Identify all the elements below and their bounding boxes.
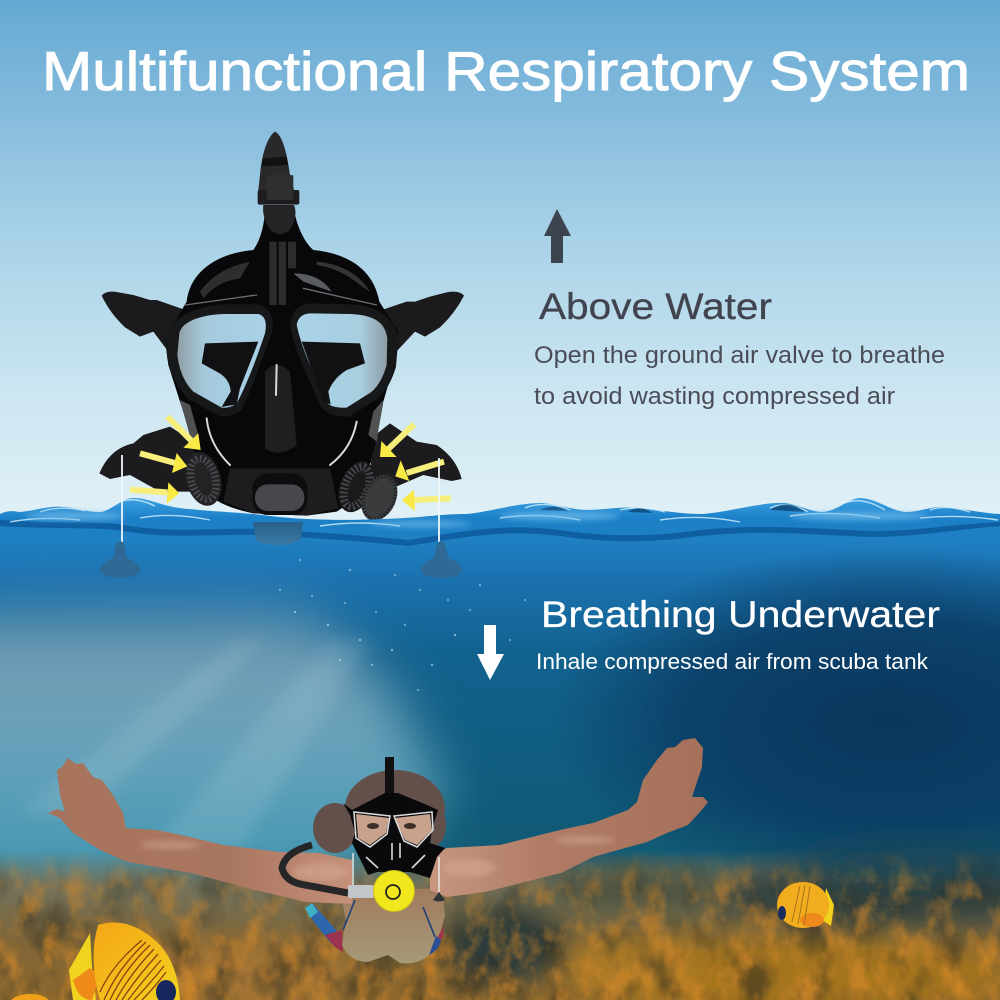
heading: above water: Above Water [539,286,772,327]
arrow: up, above water [544,209,571,263]
mask camera mount [269,242,296,305]
mask lower right strap fin [367,423,462,495]
arrow: upper left [167,417,201,450]
metal connector [348,885,374,898]
arrow: lower left [130,482,179,504]
mesh side panels [180,400,383,442]
mask gloss lines [185,288,377,465]
mask buckle [258,157,299,234]
underwater scene [0,538,1000,1000]
yellow regulator [374,870,414,912]
fish: bottom left butterflyfish [69,922,180,1000]
diver torso [340,888,445,963]
seaweed reef floor [0,838,1000,1000]
water surface waves [0,498,1000,546]
nose pocket [265,365,297,453]
inner strap seen through lenses [202,342,365,407]
center valve [252,473,307,515]
dome gloss highlights [200,262,370,298]
yellow airflow arrows [130,417,451,511]
arm highlights [140,836,615,881]
arrow: upper right [380,424,414,457]
text: above water description: to avoid wasting compressed air [534,383,895,410]
mask lower left strap fin [99,427,197,492]
right air tube and float [421,458,462,578]
white tubes and float on diver [353,853,445,902]
arrow: lower right [402,490,451,511]
air hose [282,845,348,893]
mini mask [343,757,445,878]
diver swimsuit [305,903,343,952]
arrow: middle left [140,453,187,473]
mask snout below the waterline [253,522,303,545]
left air tube and float [100,455,140,578]
mask upper right strap fin [377,292,464,358]
right filter intake and knob [331,456,404,526]
fish: right butterflyfish [777,882,834,928]
mask top fin [258,132,294,190]
swimsuit right side and straps [343,900,444,955]
left arm and hand [48,758,352,904]
heading: breathing underwater: Breathing Underwater [541,594,940,635]
background: sky above water [0,0,1000,530]
text: underwater description: Inhale compressed air from scuba tank [536,649,929,674]
mask body [165,205,398,516]
diver [48,738,708,963]
arrow: down, underwater [477,625,504,680]
arrow: middle right [395,460,444,481]
fish: small orange fish at bottom edge [11,994,49,1000]
hair [313,770,446,853]
mask upper left strap fin [102,292,190,358]
right arm and hand [430,738,708,897]
chin panel [223,468,338,516]
right lens [290,303,398,417]
left lens [165,304,273,416]
title: Multifunctional Respiratory System [42,40,970,102]
text: above water description [534,342,945,410]
left filter intake [180,448,227,510]
product: full face mask [99,132,464,526]
text: above water description: Open the ground air valve to breathe [534,342,945,369]
